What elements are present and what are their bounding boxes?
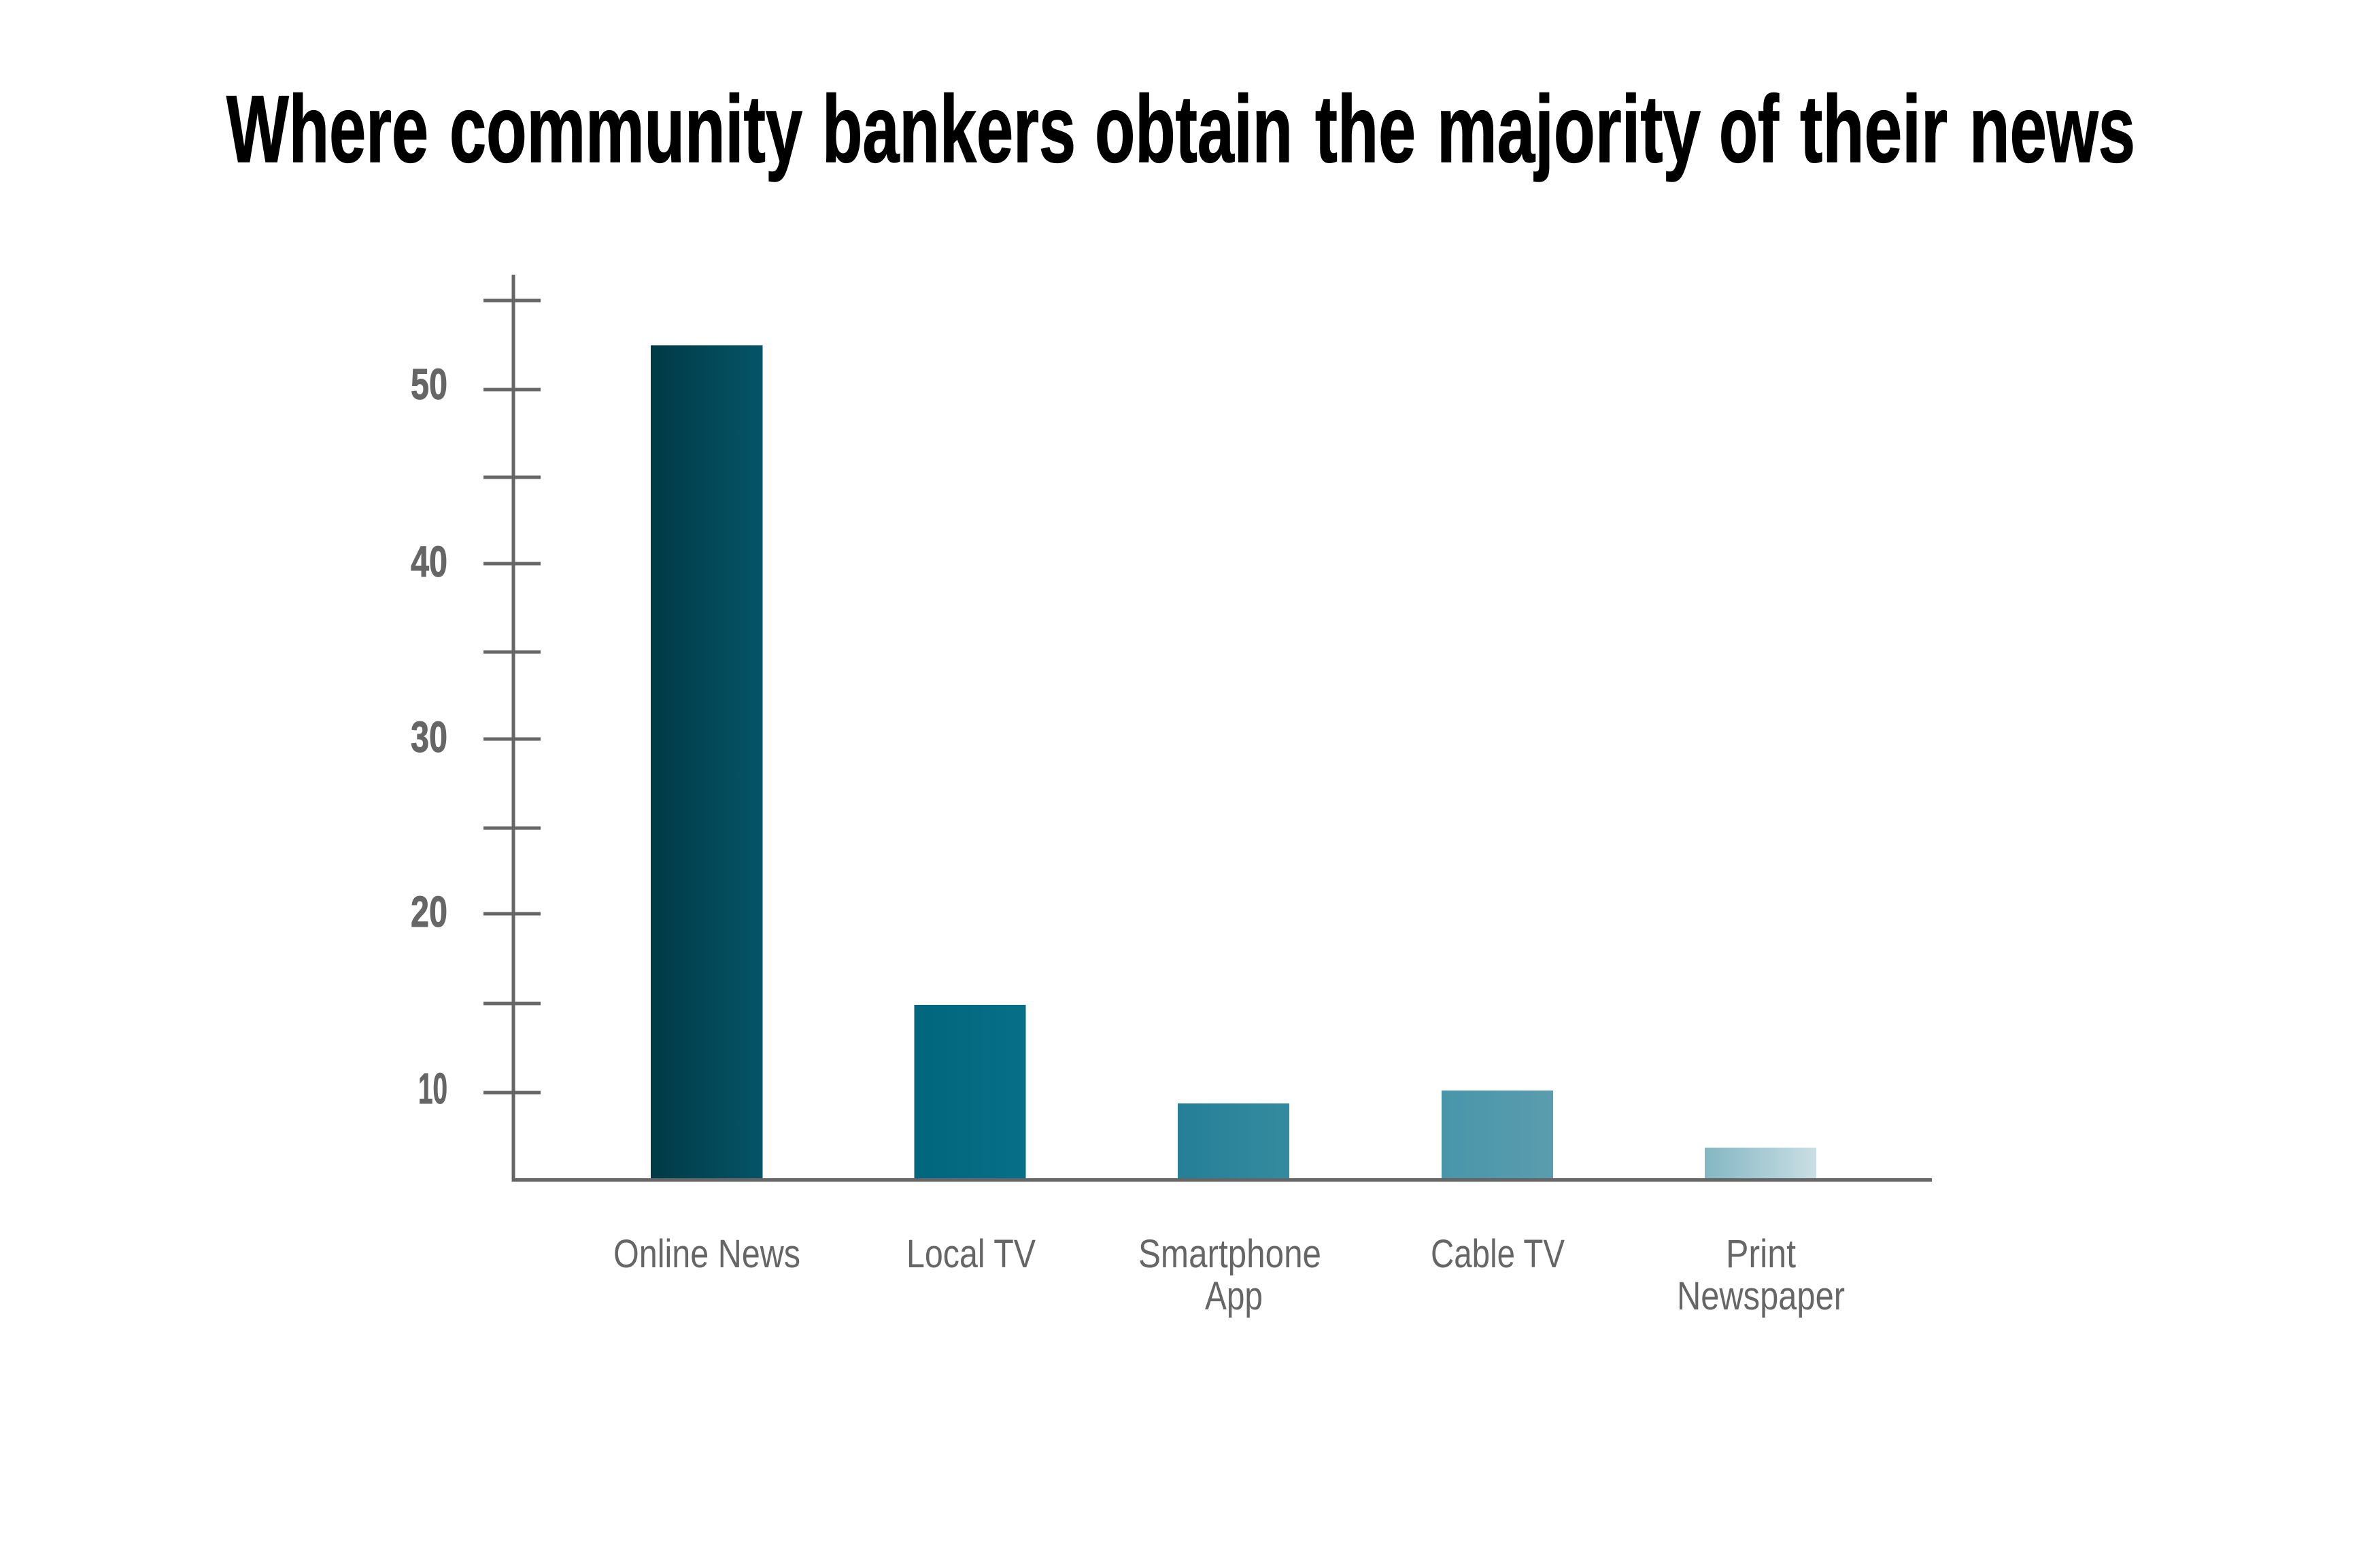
x axis labels: Print — [1726, 1232, 1796, 1276]
x axis labels: Online News — [613, 1232, 800, 1276]
x axis labels: Newspaper — [1677, 1274, 1845, 1318]
title: majority — [1437, 75, 1701, 182]
x axis — [512, 1178, 1932, 1182]
bar: Smartphone App — [1178, 1103, 1289, 1179]
y axis with tick marks — [483, 275, 541, 1182]
x axis labels: Cable TV — [1431, 1232, 1565, 1276]
bar chart — [411, 275, 1932, 1318]
title: of — [1719, 75, 1779, 182]
title: the — [1315, 75, 1416, 182]
y axis labels: 50 — [411, 360, 447, 409]
title: news — [1969, 75, 2135, 182]
x axis labels — [613, 1232, 1845, 1318]
y axis labels — [411, 360, 447, 1113]
bar: Cable TV — [1442, 1091, 1553, 1179]
bar: Local TV — [914, 1005, 1025, 1179]
x axis labels: Local TV — [906, 1232, 1036, 1276]
title: obtain — [1095, 75, 1293, 182]
y axis labels: 20 — [411, 887, 447, 936]
y axis labels: 30 — [411, 713, 447, 761]
y axis labels: 40 — [411, 537, 447, 586]
x axis labels: App — [1205, 1274, 1263, 1318]
title: bankers — [822, 75, 1076, 182]
y axis labels: 10 — [418, 1064, 447, 1113]
bar: Print Newspaper — [1705, 1148, 1816, 1179]
x axis labels: Smartphone — [1138, 1232, 1321, 1276]
title: community — [449, 75, 802, 182]
bar: Online News — [651, 345, 763, 1179]
title — [226, 75, 2135, 182]
title: Where — [226, 75, 428, 182]
title: their — [1800, 75, 1948, 182]
